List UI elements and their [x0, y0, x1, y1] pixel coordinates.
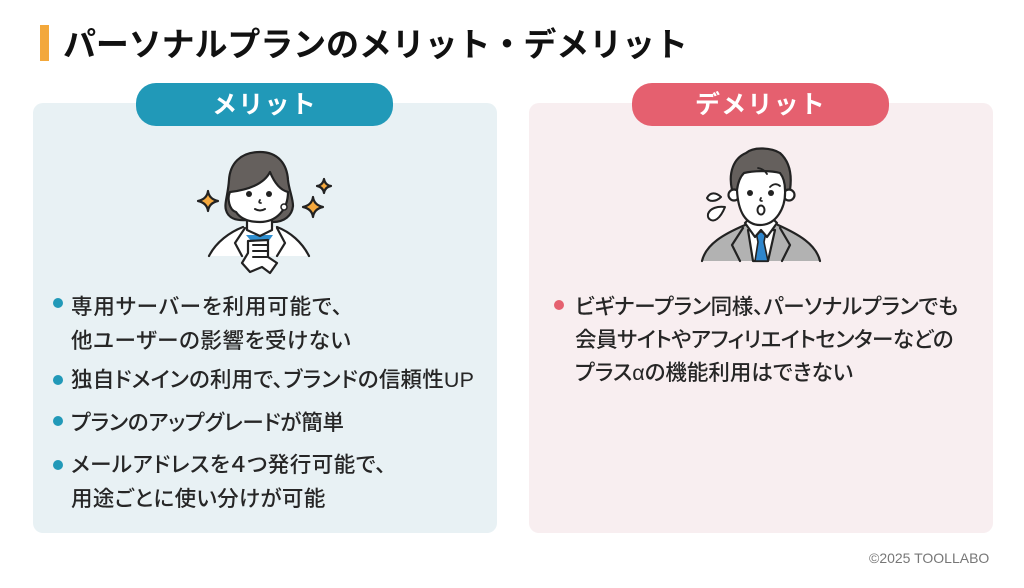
demerit text: [575, 295, 958, 385]
copyright: ©2025 TOOLLABO: [869, 550, 989, 566]
bullet 2: [53, 375, 63, 385]
demerit text: ビギナープラン同様、パーソナルプランでも: [575, 295, 958, 319]
merit text 4: [71, 453, 387, 511]
merits header pill: [136, 83, 393, 126]
merit text 1: 専用サーバーを利用可能で、: [71, 295, 343, 319]
title: パーソナルプランのメリット・デメリット: [63, 26, 688, 63]
demerit text: 会員サイトやアフィリエイトセンターなどの: [575, 328, 953, 352]
merit text 1: 他ユーザーの影響を受けない: [71, 329, 351, 353]
bullet: [554, 300, 564, 310]
demerits header pill: デメリット: [695, 91, 826, 119]
panel: merits: [33, 103, 497, 533]
bullet 3: [53, 416, 63, 426]
merit text 4: 用途ごとに使い分けが可能: [71, 487, 326, 511]
demerits header pill: [632, 83, 889, 126]
merit text 1: [71, 295, 351, 353]
bullet 1: [53, 298, 63, 308]
merit text 2: 独自ドメインの利用で、ブランドの信頼性UP: [71, 368, 474, 392]
panel: demerits: [529, 103, 993, 533]
demerit text: プラスαの機能利用はできない: [575, 361, 853, 385]
bullet 4: [53, 460, 63, 470]
icon: woman with sparkles: [196, 150, 332, 274]
title accent bar: [40, 25, 49, 61]
merits header pill: メリット: [212, 91, 317, 119]
merit text 4: メールアドレスを４つ発行可能で、: [71, 453, 387, 477]
merit text 3: プランのアップグレードが簡単: [71, 411, 344, 435]
icon: man in suit with sweat drops: [700, 147, 822, 262]
